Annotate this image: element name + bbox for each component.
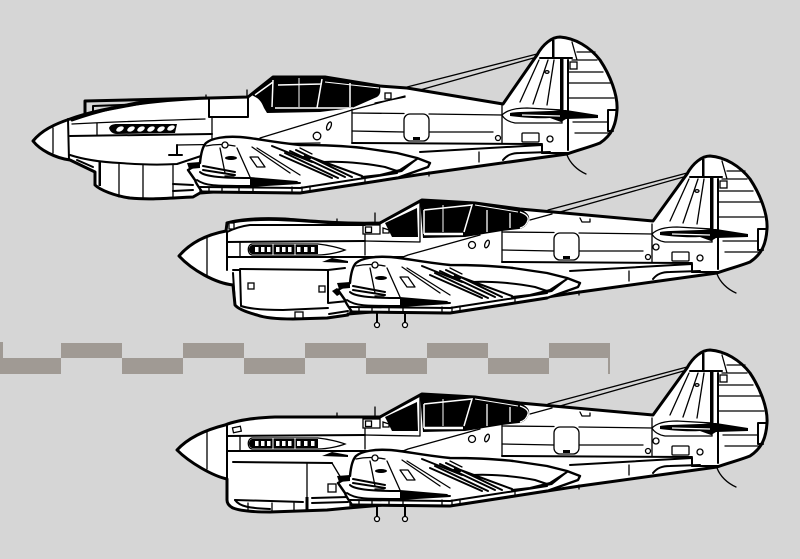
access door <box>404 114 429 141</box>
aircraft 3: bottom, with deep chin radiator <box>177 350 767 522</box>
wing and landing gear fairing <box>187 137 430 193</box>
checkered stripe band <box>0 342 610 374</box>
landing gear legs <box>374 501 408 522</box>
tail wheel curve <box>717 274 736 293</box>
wing and landing gear fairing <box>337 257 580 313</box>
aircraft 2: middle, with shrouded nose and underwing gear legs <box>179 156 767 328</box>
lower cowling panels <box>227 219 365 318</box>
windscreen and black canopy <box>383 200 529 238</box>
fuselage box panel <box>363 225 380 234</box>
rear fuselage and tail details <box>502 353 766 489</box>
antenna wires <box>407 54 537 90</box>
exhaust stacks <box>248 244 345 255</box>
antenna wires <box>548 173 687 212</box>
rear fuselage and tail details <box>502 159 766 295</box>
aircraft 1: top, shark-nose variant <box>33 37 617 199</box>
small round ports and hatch <box>496 136 500 140</box>
antenna wires <box>548 367 687 406</box>
fuselage outline <box>33 37 617 199</box>
upper forward fuselage details <box>207 394 659 469</box>
fin spar <box>560 59 564 111</box>
tail wheel curve <box>567 155 586 174</box>
wing and landing gear fairing <box>337 450 580 506</box>
tailplane with black elevator spike <box>502 108 598 123</box>
tail wheel curve <box>717 468 736 487</box>
exhaust stacks <box>109 124 177 134</box>
rear fuselage and tail details <box>352 40 616 176</box>
shroud tube above nose <box>85 98 210 114</box>
windscreen and black canopy <box>250 77 391 140</box>
upper forward fuselage details <box>207 200 659 275</box>
lower radiator panels <box>227 426 348 512</box>
forward fuselage panel lines <box>53 90 405 198</box>
fuselage outline <box>177 350 767 512</box>
fuselage outline <box>179 156 767 319</box>
landing gear legs <box>374 306 408 328</box>
